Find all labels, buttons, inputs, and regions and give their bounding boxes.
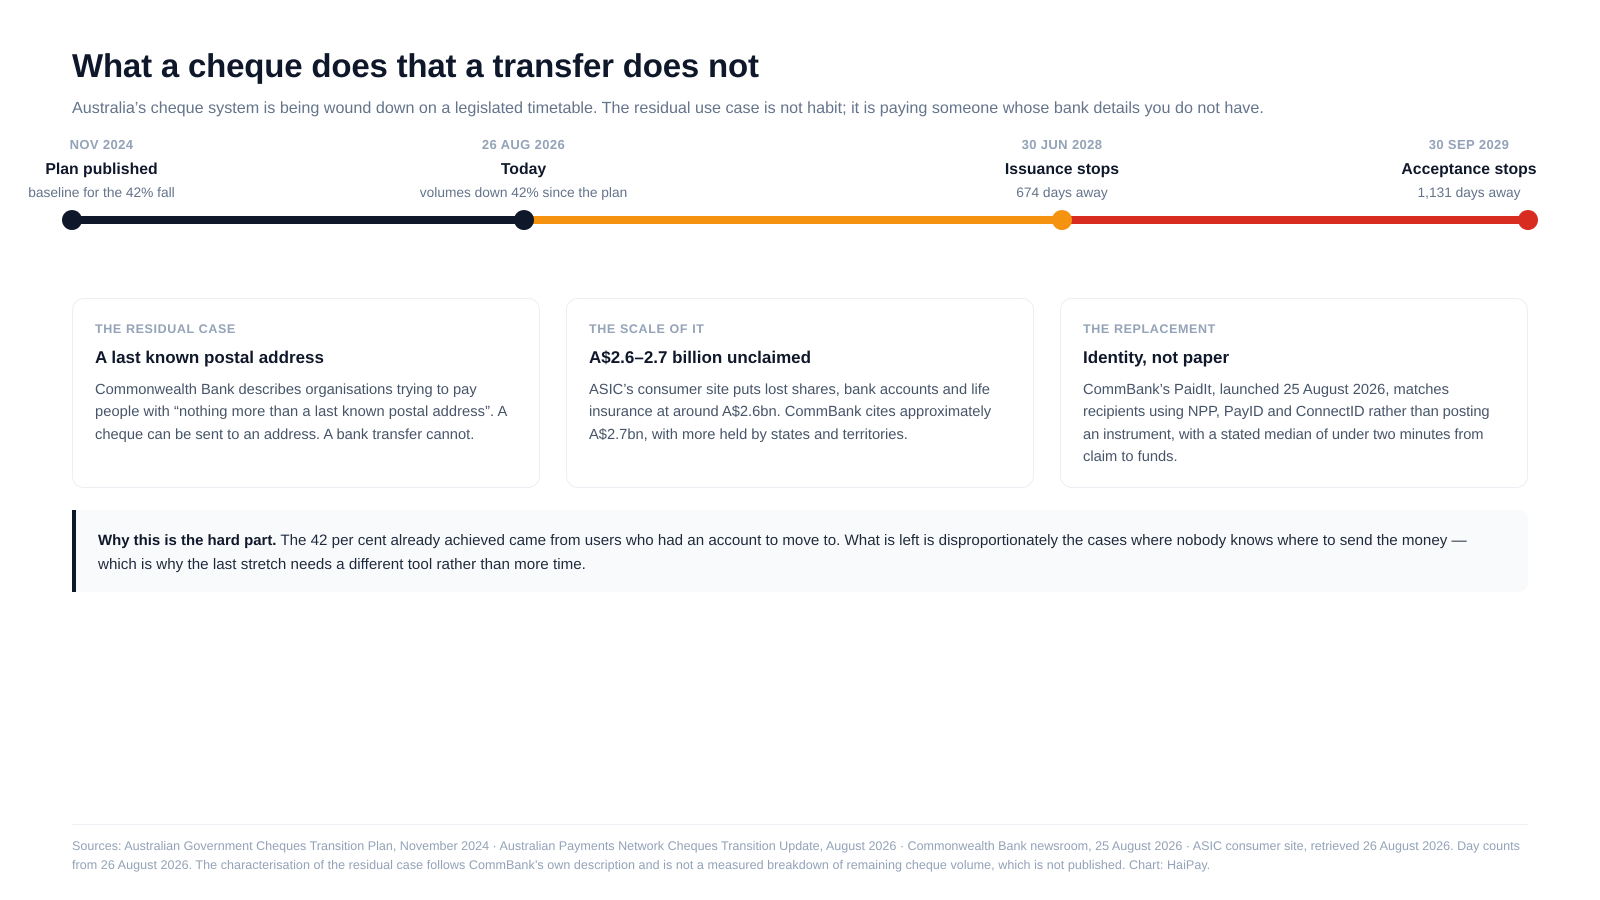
milestone: issuance stops [1005, 136, 1119, 200]
milestone: plan published: baseline for the 42% fall [28, 185, 175, 200]
timeline [28, 136, 1538, 230]
timeline segment: to issuance stop [524, 216, 1062, 224]
marker: plan published [62, 210, 82, 230]
callout [72, 510, 1528, 592]
milestone: acceptance stops: Acceptance stops [1401, 161, 1537, 178]
card body: claim to funds. [1083, 449, 1178, 465]
callout: which is why the last stretch needs a different tool rather than more time. [98, 556, 586, 573]
marker: issuance stops [1052, 210, 1072, 230]
milestone: plan published [28, 136, 175, 200]
card body: recipients using NPP, PayID and ConnectID rather than posting [1083, 404, 1490, 420]
milestone: today [420, 136, 627, 200]
card heading: A$2.6–2.7 billion unclaimed [589, 348, 811, 367]
sources footer: Sources: Australian Government Cheques Transition Plan, November 2024 · Australian Payments Network Cheques Transition Update, August 2026 · Commonwealth Bank newsroom, 25 August 2026 · ASIC consumer site, retrieved 26 August 2026. Day counts [72, 839, 1520, 853]
card body: CommBank’s PaidIt, launched 25 August 2026, matches [1083, 382, 1449, 398]
timeline segment: to acceptance stop [1062, 216, 1528, 224]
card body: people with “nothing more than a last known postal address”. A [95, 404, 507, 420]
card heading: Identity, not paper [1083, 348, 1229, 367]
milestone: issuance stops: Issuance stops [1005, 161, 1119, 178]
sources footer: from 26 August 2026. The characterisation of the residual case follows CommBank’s own description and is not a measured breakdown of remaining cheque volume, which is not published. Chart: HaiPay. [72, 858, 1210, 872]
eyebrow: THE REPLACEMENT [1083, 322, 1216, 336]
card body: ASIC’s consumer site puts lost shares, bank accounts and life [589, 382, 990, 398]
milestone: plan published: Plan published [45, 161, 158, 178]
card body: an instrument, with a stated median of under two minutes from [1083, 426, 1483, 442]
card body [589, 382, 991, 442]
panel: the replacement [1060, 298, 1528, 488]
panel: the scale of it [566, 298, 1034, 488]
card body [95, 382, 508, 442]
subtitle: Australia’s cheque system is being wound down on a legislated timetable. The residual use case is not habit; it is paying someone whose bank details you do not have. [72, 99, 1264, 117]
card body: A$2.7bn, with more held by states and territories. [589, 426, 908, 442]
card heading: A last known postal address [95, 348, 324, 367]
card body: cheque can be sent to an address. A bank transfer cannot. [95, 426, 474, 442]
milestone: today: 26 AUG 2026 [482, 136, 565, 152]
marker: acceptance stops [1518, 210, 1538, 230]
milestone: plan published: NOV 2024 [70, 136, 133, 152]
eyebrow: THE RESIDUAL CASE [95, 322, 236, 336]
panel: the residual case [72, 298, 540, 488]
milestone: acceptance stops: 1,131 days away [1418, 185, 1520, 200]
card body: Commonwealth Bank describes organisations trying to pay [95, 382, 477, 398]
milestone: acceptance stops: 30 SEP 2029 [1429, 136, 1509, 152]
milestone: issuance stops: 30 JUN 2028 [1022, 136, 1102, 152]
milestone: today: volumes down 42% since the plan [420, 185, 627, 200]
timeline segment: past [72, 216, 524, 224]
sources footer [72, 824, 1528, 881]
milestone: issuance stops: 674 days away [1016, 185, 1108, 200]
card body: insurance at around A$2.6bn. CommBank cites approximately [589, 404, 991, 420]
milestone: today: Today [501, 161, 546, 178]
eyebrow: THE SCALE OF IT [589, 322, 705, 336]
card body [1083, 382, 1490, 465]
callout: Why this is the hard part. The 42 per cent already achieved came from users who had an account to move to. What is left is disproportionately the cases where nobody knows where to send the money — [98, 532, 1467, 549]
title: What a cheque does that a transfer does not [72, 47, 759, 84]
marker: today [514, 210, 534, 230]
milestone: acceptance stops [1401, 136, 1537, 200]
